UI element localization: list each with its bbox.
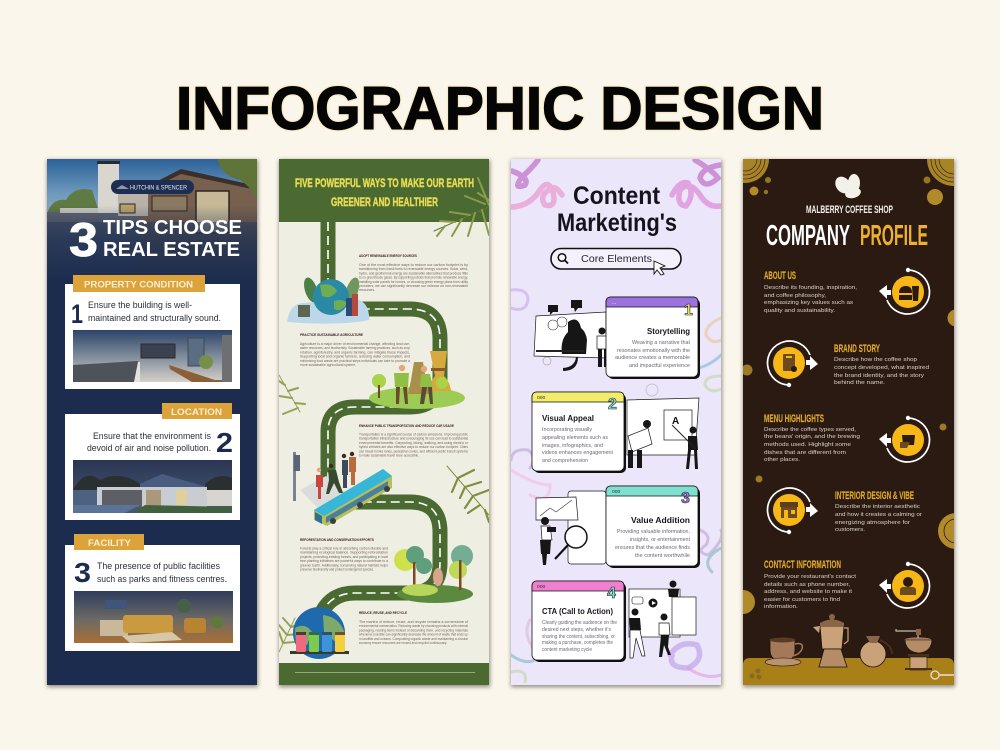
palm leaf bottom left [279,617,296,652]
section: interior design and vibe: energizing atmosphere for [835,520,910,526]
text block: public transportation: environmental benefits. Carpooling, biking, walking, and using electric or [359,441,469,445]
card 3: value addition: 3 [681,490,690,507]
card 1: storytelling: resonates emotionally with the [617,348,690,354]
card: location [65,403,240,520]
illustration: visual appeal: A [672,416,679,427]
section: contact information: Provide your restaurant's contact [764,574,857,580]
illustration: globe and city [287,276,369,324]
decorative squiggles [511,160,722,682]
card 4: call to action: ooo [537,584,546,590]
card 2: visual appeal: Visual Appeal [542,413,594,423]
text block: reforestation: REFORESTATION AND CONSERVATION EFFORTS [300,538,374,542]
card: property condition: maintained and structurally sound. [88,313,221,323]
text block: reforestation: preserve biodiversity and protect endangered species. [300,568,374,572]
illustration: farmers and wheat [369,351,465,409]
card: facility: FACILITY [88,538,132,549]
icon: menu book [768,341,818,387]
palm leaf lower right [447,466,489,522]
header band: GREENER AND HEALTHIER [331,195,438,209]
text block: reforestation: greener Earth. Additionally, conserving natural habitats helps [300,563,388,567]
card 1: storytelling: ... [612,300,616,306]
card 3: value addition: Providing valuable information, [617,529,690,535]
icon: storefront [768,488,818,534]
text block: renewable energy: One of the most effective ways to reduce our carbon footprint is by [359,263,468,267]
card 4: call to action [532,581,626,662]
section: brand story: behind the name. [834,380,885,386]
search bar [551,248,681,275]
section: contact information: details such as phone number, [764,582,851,588]
card 4: call to action: desired next steps, whether it's [542,627,611,633]
title: INFOGRAPHIC DESIGN [176,74,824,142]
text block: public transportation: can invest in bike lanes, pedestrian zones, and efficient public transit systems [359,449,468,453]
heading: 3 tips: TIPS CHOOSE [103,216,242,239]
card: property condition: 1 [71,299,83,329]
card 1: storytelling: Weaving a narrative that [632,340,691,346]
text block: reduce reuse recycle: packaging, reusing items instead of discarding them, and recycling materials [359,628,468,632]
section: interior design and vibe: customers. [835,527,865,533]
panel: real estate tips [47,159,257,685]
text block: agriculture: water resources, and biodiversity. Sustainable farming practices, such as crop [300,346,410,350]
photo: house at dusk [73,460,232,513]
heading: brand name: MALBERRY COFFEE SHOP [806,204,893,216]
illustration: glass carafe [860,636,892,667]
heading: company profile: COMPANY [766,220,850,252]
icon: beans and portafilter [750,668,954,680]
text block: reforestation: projects, protecting existing forests, and participating in local [300,555,388,559]
section: brand story: concept developed, what inspired [834,365,929,371]
section: interior design and vibe: and how it creates a calming or [835,512,922,518]
card 3: value addition: the content worthwhile [635,553,690,559]
card 4: call to action: making a purchase, completes the [542,640,613,646]
card: facility: 3 [74,557,91,588]
heading: 3 tips: REAL ESTATE [103,238,240,261]
heading: company profile: PROFILE [860,220,928,252]
card: location: LOCATION [171,407,222,418]
card 3: value addition: ooo [612,489,621,495]
illustration: coffee grinder [896,629,932,670]
card 4: call to action: sharing the content, subscribing, or [542,634,615,640]
text block: reduce reuse recycle [359,611,469,645]
section: about us [764,268,929,314]
text block: renewable energy: providers, we can significantly decrease our reliance on non-renewable [359,284,468,288]
section: menu highlights: Describe the coffee types served, [764,427,857,433]
section: contact information: easier for customers to find [764,597,840,603]
section: brand story: BRAND STORY [834,343,880,355]
hero house photo [47,159,257,264]
card 3: value addition: insights, or entertainment [630,537,691,543]
heading: 3 tips [70,220,242,257]
section: contact information: information. [764,604,798,610]
card 2: visual appeal: images, infographics, and [542,443,603,449]
card 2: visual appeal: ooo [537,395,546,401]
card 3: value addition: ensures that the audience finds [615,545,691,551]
road [322,222,440,612]
text block: agriculture: Agriculture is a major driver of environmental change, affecting land use, [300,342,410,346]
heading: content marketing's: Marketing's [557,209,677,237]
text block: renewable energy: hydro, and geothermal energy are sustainable alternatives that produce little [359,271,468,275]
title: INFOGRAPHIC DESIGN [176,74,824,142]
card: location: 2 [216,427,233,458]
decorative dots [721,132,981,614]
section: contact information: address, and website to make it [764,589,853,595]
section: menu highlights: other places. [764,457,800,463]
illustration: globe with recycling bins [290,607,349,659]
card: location: devoid of air and noise pollution. [87,443,211,453]
illustration: value addition [536,491,606,565]
text block: public transportation: to make sustainable travel more accessible. [359,454,419,458]
panel: five ways greener earth [279,159,489,685]
text block: reduce reuse recycle: economy ensure resources are reused and recycled continuously. [359,641,447,645]
text block: renewable energy: to no greenhouse gases. By supporting policies that promote renewable energy, [359,276,468,280]
header band: FIVE POWERFUL WAYS TO MAKE OUR EARTH [295,176,474,190]
icon: coffee cup [879,416,929,462]
counter table [743,658,954,685]
card 1: storytelling [606,297,700,379]
section: brand story: the brand identity, and the story [834,373,924,379]
header band [279,159,489,222]
icon: coffee beans logo [832,174,862,200]
text block: agriculture: more sustainable agricultural system. [300,363,356,367]
illustration: call to action [629,580,696,658]
illustration: forest [394,545,473,603]
text block: agriculture [300,333,410,367]
text block: renewable energy: ADOPT RENEWABLE ENERGY SOURCES [359,254,417,258]
section: brand story [768,341,929,387]
section: contact information: CONTACT INFORMATION [764,559,841,571]
section: menu highlights: the beans' origin, and the brewing [764,434,860,440]
text block: reforestation: tree-planting initiatives are powerful ways to contribute to a [300,559,388,563]
section: about us: emphasizing key values such as [764,300,853,306]
section: interior design and vibe: INTERIOR DESIGN & VIBE [835,490,914,502]
section: menu highlights [764,413,929,463]
text block: reforestation [300,538,388,572]
section: about us: quality and sustainability. [764,308,835,314]
card 2: visual appeal: 2 [608,396,617,413]
heading: content marketing's: Content [573,182,661,210]
heading: content marketing's [558,186,676,236]
card: facility: such as parks and fitness centres. [97,574,227,584]
text block: reduce reuse recycle: whenever possible can significantly decrease the amount of waste that ends up [359,633,468,637]
text block: reduce reuse recycle: REDUCE, REUSE, AND RECYCLE [359,611,407,615]
card: property condition: Ensure the building is well- [88,300,192,310]
card 1: storytelling: Storytelling [647,326,690,336]
text block: public transportation: Transportation is a significant source of carbon emissions. Improving public [359,432,468,436]
section: brand story: Describe how the coffee shop [834,357,917,363]
card: facility [65,534,240,651]
text block: renewable energy: installing solar panels for homes, or choosing green energy plans from utility [359,280,468,284]
palm leaf top right [434,178,489,236]
text block: agriculture: rotation, agroforestry, and organic farming, can mitigate these impacts. [300,350,410,354]
card 4: call to action: Clearly guiding the audience on the [542,620,617,626]
section: menu highlights: dishes that are different from [764,450,847,456]
card: facility: The presence of public facilities [97,561,220,571]
logo badge: HUTCHIN & SPENCER [130,186,188,192]
heading: 3 tips: 3 [69,213,98,266]
card 1: storytelling: audience creates a memorable [615,355,690,361]
text block: reforestation: maintaining ecological balance. Supporting reforestation [300,551,388,555]
card 4: call to action: content marketing cycle [542,647,592,653]
text block: renewable energy: resources. [359,288,375,292]
card 2: visual appeal: Incorporating visually [542,427,593,433]
text block: renewable energy: transitioning from fossil fuels to renewable energy sources. Solar, wind, [359,267,468,271]
section: menu highlights: MENU HIGHLIGHTS [764,413,824,425]
text block: public transportation: hybrid vehicles are also effective ways to reduce our carbon footprint. Cities [359,445,468,449]
card 2: visual appeal [532,392,626,473]
section: about us: Describe its founding, inspiration, [764,285,858,291]
card: property condition: PROPERTY CONDITION [84,280,193,290]
card 4: call to action: 4 [607,585,616,602]
photo: kitchen [73,330,232,382]
text block: reduce reuse recycle: environmental conservation. Reducing waste by choosing products with minimal [359,624,468,628]
search bar: Core Elements [581,253,652,265]
illustration: bus and commuters [293,452,392,526]
text block: public transportation: transportation infrastructure and encouraging its use can lead to substantial [359,437,468,441]
panel: content marketing [511,159,722,685]
section: interior design and vibe: Describe the interior aesthetic [835,504,920,510]
panel: coffee shop company profile [721,132,981,685]
photo: living room [74,591,233,643]
card 2: visual appeal: and comprehension [542,458,588,464]
section: interior design and vibe [768,488,922,534]
illustration: storytelling [534,300,609,371]
text block: public transportation [359,424,469,458]
section: contact information [764,559,929,610]
card 3: value addition [606,486,700,568]
text block: agriculture: Supporting local and organic farmers, reducing water consumption, and [300,355,410,359]
section: about us: and coffee philosophy, [764,293,827,299]
card 2: visual appeal: appealing elements such as [542,435,609,441]
text block: reduce reuse recycle: in landfills and oceans. Composting organic waste and maintaining a circular [359,637,469,641]
card 2: visual appeal: videos enhances engagement [542,450,614,456]
card 4: call to action: CTA (Call to Action) [542,606,613,616]
illustration: visual appeal [627,384,699,469]
card 1: storytelling: and impactful experience [629,363,690,369]
text block: reforestation: Forests play a critical role in absorbing carbon dioxide and [300,546,388,550]
illustration: moka pot [813,614,848,667]
text block: reduce reuse recycle: The mantra of reduce, reuse, and recycle remains a cornerstone of [359,620,468,624]
text block: agriculture: PRACTICE SUSTAINABLE AGRICULTURE [300,333,363,337]
card: property condition [65,275,240,389]
text block: agriculture: minimizing food waste are practical steps individuals can take to promote a [300,359,410,363]
text block: public transportation: ENHANCE PUBLIC TRANSPORTATION AND REDUCE CAR USAGE [359,424,454,428]
illustration: coffee cup and saucer [765,638,802,666]
section: menu highlights: methods used. Highlight some [764,442,851,448]
icon: person [879,562,929,608]
card 1: storytelling: 1 [684,302,693,319]
panel shadows [47,160,955,687]
text block: renewable energy [359,254,468,292]
card 3: value addition: Value Addition [631,515,690,525]
section: about us: ABOUT US [764,270,796,282]
palm leaf left [279,375,305,414]
icon: food and drink [879,268,929,314]
footer band [279,663,489,685]
logo badge [111,180,194,194]
card: location: Ensure that the environment is [93,431,211,441]
